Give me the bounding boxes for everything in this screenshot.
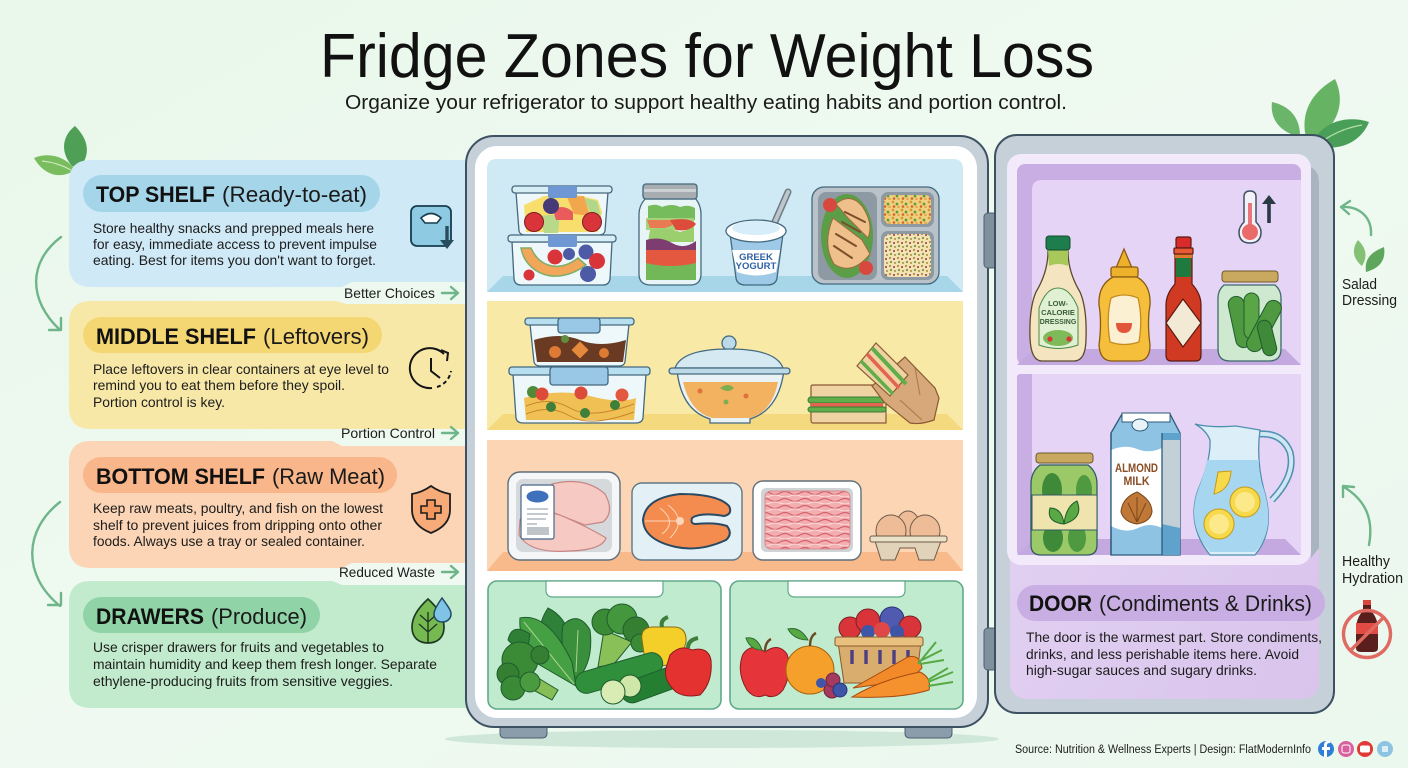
panel: drawers — [69, 581, 470, 708]
icon: thermometer with up arrow — [1239, 191, 1276, 243]
text: middle shelf body: Portion control is key. — [93, 394, 225, 410]
food: orange — [786, 628, 834, 694]
heading: drawers: (Produce) — [211, 604, 307, 629]
door heading — [1017, 585, 1325, 621]
food: berry basket — [835, 607, 923, 683]
drawer: fruits — [730, 581, 963, 709]
shelf: top — [487, 159, 963, 292]
door shelf: lower — [1017, 374, 1301, 555]
food: pickle jar upper — [1218, 271, 1284, 361]
heading: top shelf: (Ready-to-eat) — [222, 182, 367, 207]
icon: leaves top left — [34, 126, 87, 175]
text: middle shelf body: Place leftovers in clear containers at eye level to — [93, 361, 389, 377]
food: lemon water pitcher — [1194, 424, 1291, 555]
text: bottom shelf body: foods. Always use a tray or sealed container. — [93, 533, 365, 549]
door body text: drinks, and less perishable items here. Avoid — [1026, 646, 1299, 662]
food: salad jar — [639, 184, 701, 285]
food: salad dressing bottle: CALORIE — [1041, 308, 1075, 317]
food: greek yogurt — [726, 192, 788, 285]
door hinges — [984, 213, 997, 670]
food: stacked fruit containers — [508, 186, 616, 285]
food: broccoli right — [592, 604, 649, 667]
fridge floor shadow — [445, 730, 999, 748]
food: chicken tray — [508, 472, 620, 560]
heading: drawers — [83, 597, 320, 633]
food: stacked leftover containers — [509, 318, 650, 423]
arrow: healthy hydration — [1343, 486, 1370, 545]
text: middle shelf body: remind you to eat them before they spoil. — [93, 377, 345, 393]
label: salad dressing: Salad — [1342, 277, 1377, 293]
icon: no soda — [1344, 600, 1390, 658]
text: top shelf body: Store healthy snacks and prepped meals here — [93, 220, 374, 236]
text: top shelf body — [93, 220, 377, 268]
food: almond milk carton: MILK — [1124, 476, 1150, 488]
food: greek yogurt: YOGURT — [736, 261, 777, 272]
door heading: (Condiments & Drinks) — [1099, 591, 1312, 616]
heading: bottom shelf — [83, 457, 397, 493]
social icons — [1318, 741, 1393, 757]
callout: portion control: Portion Control — [341, 425, 435, 441]
shelf: bottom — [487, 440, 963, 571]
food: greek yogurt: GREEK — [739, 252, 773, 263]
food: red pepper — [665, 638, 711, 696]
food: broccoli left — [497, 642, 558, 700]
door body text: high-sugar sauces and sugary drinks. — [1026, 662, 1257, 678]
label: healthy hydration: Healthy — [1342, 554, 1391, 570]
text: drawers body — [93, 639, 437, 689]
food: salmon tray — [632, 483, 742, 560]
text: drawers body: ethylene-producing fruits from sensitive veggies. — [93, 673, 393, 689]
heading: top shelf: TOP SHELF — [96, 182, 215, 207]
drawer: vegetables — [488, 581, 721, 709]
text: bottom shelf body: Keep raw meats, poultry, and fish on the lowest — [93, 500, 383, 516]
food: meal prep tray — [812, 187, 939, 284]
label: healthy hydration — [1342, 554, 1403, 587]
callout: reduced waste: Reduced Waste — [339, 564, 435, 580]
subtitle: Organize your refrigerator to support healthy eating habits and portion control. — [345, 91, 1067, 114]
callout: better choices: Better Choices — [344, 285, 435, 301]
shelf: middle — [487, 301, 963, 430]
panel: middle shelf — [69, 301, 470, 429]
fridge door — [995, 135, 1334, 713]
text: bottom shelf body: shelf to prevent juices from dripping onto other — [93, 517, 382, 533]
food: mixed berries — [816, 673, 847, 698]
food: sandwich — [808, 385, 886, 423]
text: top shelf body: for easy, immediate access to prevent impulse — [93, 236, 377, 252]
food: salad dressing bottle: DRESSING — [1040, 319, 1077, 326]
food: soup bowl with lid — [669, 336, 790, 423]
heading: middle shelf: (Leftovers) — [263, 324, 369, 349]
arrow: salad dressing — [1341, 201, 1371, 235]
food: ground meat tray — [753, 481, 861, 560]
text: top shelf body: eating. Best for items you don't want to forget. — [93, 252, 376, 268]
icon: shield with cross — [412, 486, 450, 533]
food: salad dressing bottle: LOW- — [1048, 299, 1068, 308]
heading: bottom shelf: (Raw Meat) — [272, 464, 385, 489]
label: salad dressing: Dressing — [1342, 293, 1397, 309]
text: bottom shelf body — [93, 500, 383, 549]
food: cucumbers — [573, 650, 684, 706]
door body text — [1026, 629, 1322, 678]
heading: drawers: DRAWERS — [96, 604, 204, 629]
heading: top shelf — [83, 175, 380, 212]
heading: bottom shelf: BOTTOM SHELF — [96, 464, 265, 489]
door heading: DOOR — [1029, 591, 1092, 616]
fridge feet — [500, 726, 952, 738]
food: hot sauce — [1166, 237, 1201, 361]
food: almond milk carton: ALMOND — [1115, 463, 1158, 475]
label: healthy hydration: Hydration — [1342, 571, 1403, 587]
food: mustard bottle — [1099, 249, 1150, 361]
food: wrap — [857, 343, 939, 424]
food: eggs in carton — [870, 511, 947, 560]
text: middle shelf body — [93, 361, 389, 410]
icon: leaves top right — [1272, 79, 1369, 148]
panel: top shelf — [69, 160, 470, 287]
food: carrots — [852, 642, 953, 697]
icon: leaf with droplet — [412, 598, 451, 643]
food: apple — [740, 638, 789, 697]
food: almond milk carton — [1111, 413, 1180, 555]
label: salad dressing — [1342, 277, 1397, 309]
heading: middle shelf: MIDDLE SHELF — [96, 324, 256, 349]
icon: small leaves — [1354, 240, 1384, 272]
food: yellow pepper — [642, 617, 686, 667]
food: pickle jar lower — [1031, 453, 1097, 555]
text: drawers body: Use crisper drawers for fruits and vegetables to — [93, 639, 384, 655]
footer source: Source: Nutrition & Wellness Experts | Design: FlatModernInfo — [1015, 742, 1311, 756]
door shelf: upper — [1017, 164, 1301, 365]
fridge body — [466, 136, 988, 727]
heading: middle shelf — [83, 317, 382, 353]
food: spinach — [508, 608, 591, 686]
text: drawers body: maintain humidity and keep them fresh longer. Separate — [93, 656, 437, 672]
arrow: top to middle shelf — [36, 237, 61, 330]
food: salad dressing bottle — [1030, 236, 1086, 361]
title: Fridge Zones for Weight Loss — [320, 22, 1094, 91]
panel: bottom shelf — [69, 441, 470, 568]
icon: clock — [410, 348, 451, 388]
door body text: The door is the warmest part. Store condiments, — [1026, 629, 1322, 645]
arrow: bottom shelf to drawers — [32, 502, 61, 606]
icon: scale with down arrow — [411, 206, 454, 249]
